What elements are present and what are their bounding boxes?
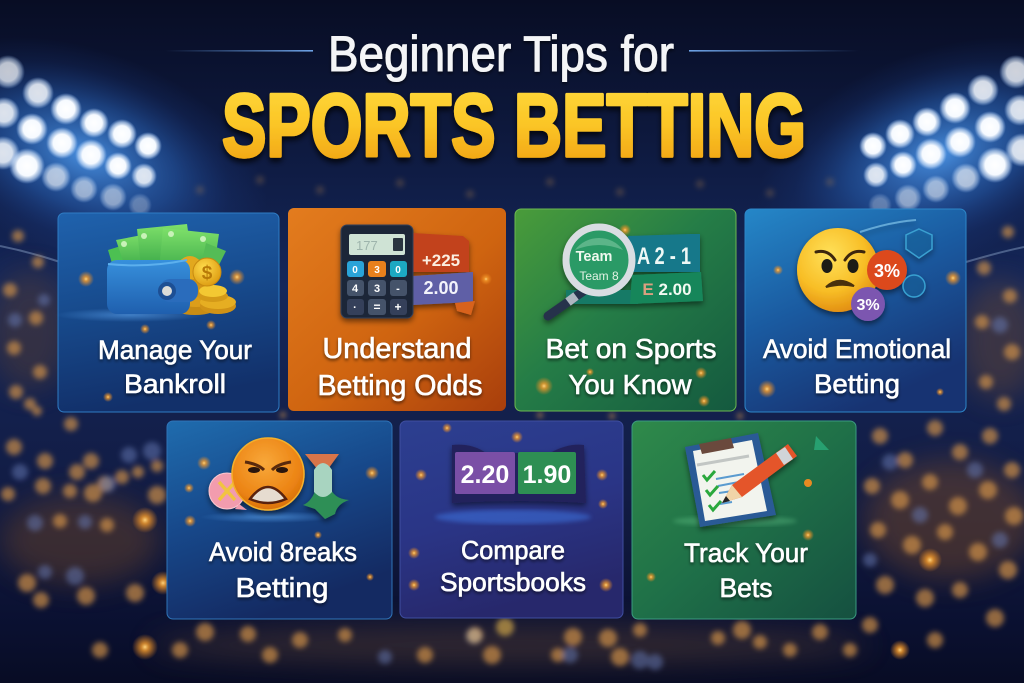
title line: Beginner Tips for: Beginner Tips for	[328, 26, 674, 82]
panel: avoid breaks betting	[167, 421, 392, 619]
label: Compare	[461, 535, 565, 565]
label: Avoid Emotional	[763, 334, 951, 364]
icon: calculator with odds: 3	[374, 265, 380, 276]
panel: compare sportsbooks	[400, 421, 623, 618]
icon: angry face with badges: 3%	[856, 297, 880, 314]
icon: wallet with cash and coins: $	[202, 263, 213, 284]
title	[165, 26, 859, 175]
label	[318, 333, 482, 402]
icon: odds comparison book	[452, 445, 586, 503]
icon: calculator with odds: ·	[353, 302, 357, 314]
icon: calculator with odds: 4	[352, 283, 359, 295]
icon: angry orange face with bubble and plant	[209, 438, 349, 519]
label	[684, 538, 808, 603]
label: Bets	[720, 573, 772, 603]
icon: magnifier over scoreboard: Team	[576, 249, 612, 265]
label: Avoid 8reaks	[209, 537, 357, 567]
panel: manage your bankroll	[55, 213, 279, 412]
label	[440, 535, 586, 597]
floodlights right	[859, 55, 1024, 217]
label: Betting	[236, 572, 328, 603]
label: Betting Odds	[318, 370, 482, 402]
label: Sportsbooks	[440, 567, 586, 597]
bokeh crowd lights	[1, 176, 1023, 670]
label: Bankroll	[124, 369, 226, 399]
icon: magnifier over scoreboard: A 2 - 1	[637, 243, 691, 270]
icon: triangle	[814, 436, 829, 450]
label	[763, 334, 951, 399]
bright sparks	[132, 507, 942, 660]
icon: calculator with odds: +225	[422, 251, 460, 270]
icon: calculator with odds: 2.00	[423, 278, 459, 298]
icon: calculator with odds: -	[396, 283, 400, 295]
label: Understand	[322, 333, 472, 365]
icon: calculator with odds	[341, 225, 475, 318]
panel: understand betting odds	[288, 208, 506, 411]
icon: wallet with cash and coins	[107, 224, 236, 315]
icon: odds comparison book: 2.20	[461, 461, 509, 489]
label: Track Your	[684, 538, 808, 568]
label	[546, 333, 716, 400]
icon: calculator with odds: 0	[352, 265, 358, 276]
title line: SPORTS BETTING: SPORTS BETTING	[222, 75, 806, 175]
icon: magnifier over scoreboard: E 2.00	[642, 280, 692, 299]
label	[209, 537, 357, 603]
label: Betting	[814, 369, 900, 399]
panel: avoid emotional betting	[745, 209, 966, 412]
label: You Know	[568, 369, 692, 400]
label: Manage Your	[98, 335, 252, 365]
floodlights left	[0, 55, 162, 217]
panel: bet on sports you know	[515, 209, 736, 411]
icon: calculator with odds: +	[394, 300, 402, 314]
icon: magnifier over scoreboard	[548, 227, 703, 316]
icon: odds comparison book: 1.90	[523, 461, 571, 489]
icon: angry face with badges	[797, 220, 932, 321]
icon: calculator with odds: 177	[356, 238, 378, 253]
icon: magnifier over scoreboard: Team 8	[579, 269, 619, 283]
label	[98, 335, 252, 399]
icon: clipboard with pencil	[685, 433, 797, 527]
panel: track your bets	[632, 421, 856, 619]
label: Bet on Sports	[546, 333, 716, 364]
icon: angry face with badges: 3%	[874, 261, 900, 281]
icon: calculator with odds: 0	[395, 265, 401, 276]
icon: calculator with odds: =	[373, 300, 381, 314]
icon: calculator with odds: 3	[374, 283, 380, 295]
